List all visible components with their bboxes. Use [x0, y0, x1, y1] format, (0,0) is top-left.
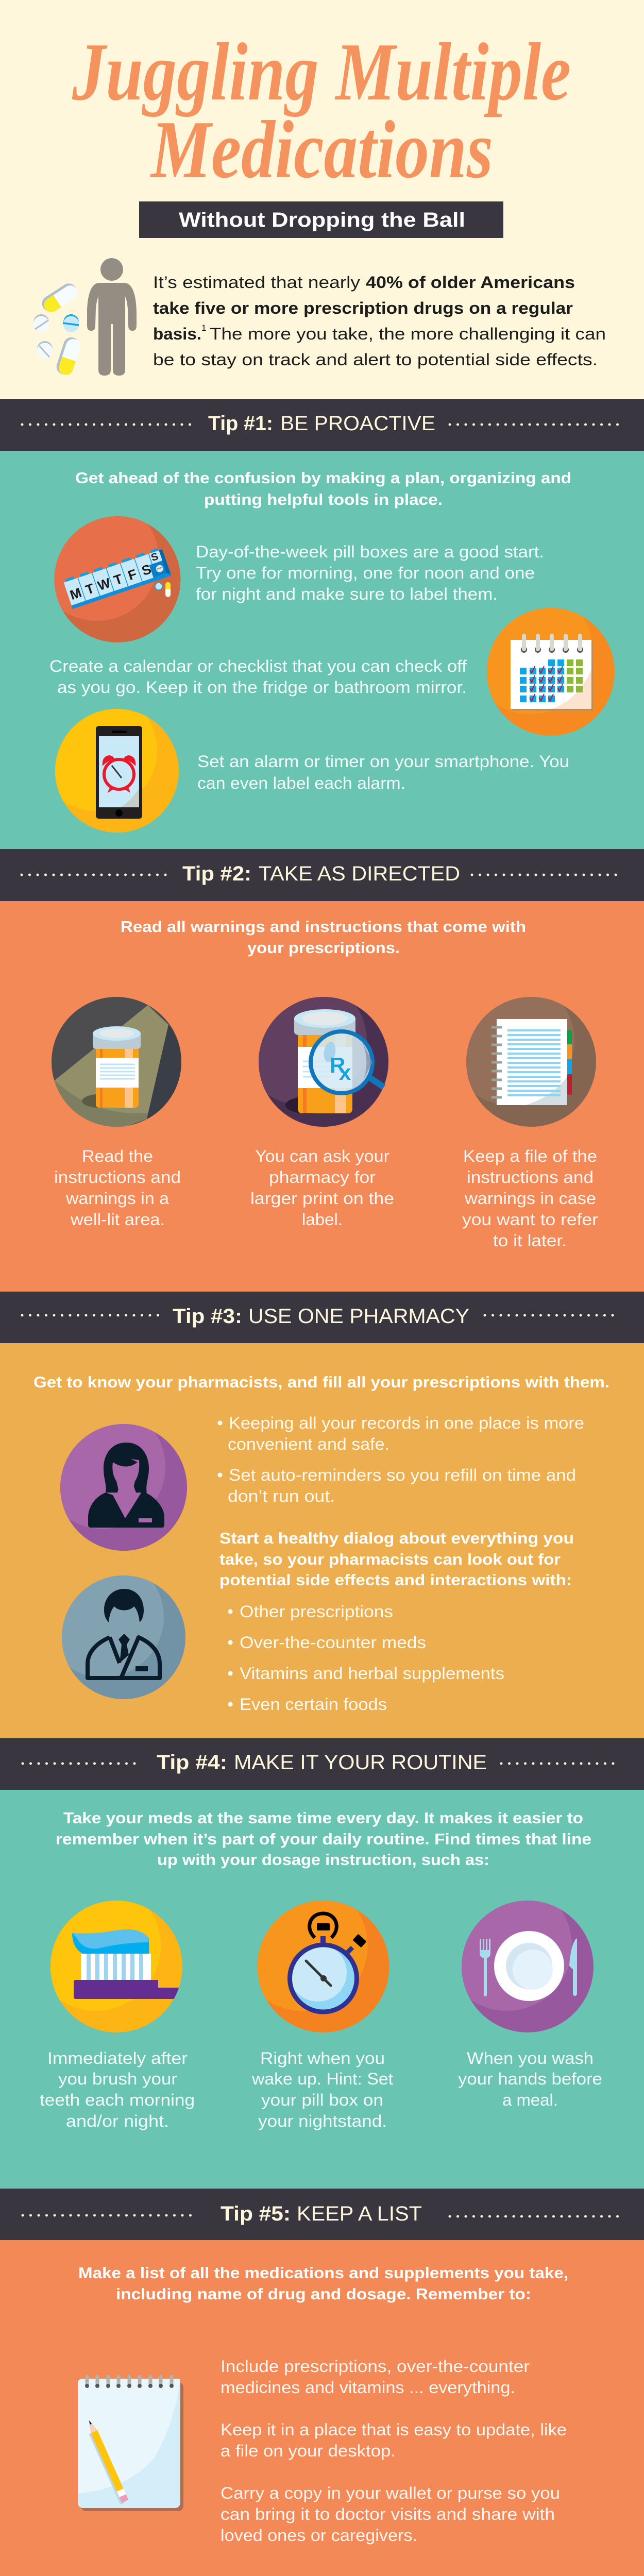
bulleted interactions list	[228, 1602, 504, 1714]
tip 4 intro: Take your meds at the same time every day. It makes it easier to	[63, 1809, 583, 1827]
tip 2 header: Tip #2:	[182, 862, 251, 885]
tip 1 intro: putting helpful tools in place.	[204, 490, 443, 509]
tip 3 intro: Get to know your pharmacists, and fill all your prescriptions with them.	[33, 1373, 609, 1391]
tip 5 intro	[78, 2264, 568, 2303]
column 3 text: Keep a file of the	[463, 1147, 597, 1165]
icon: notepad and pencil	[78, 2377, 183, 2511]
tip 2 intro: Read all warnings and instructions that come with	[121, 918, 526, 936]
list text: loved ones or caregivers.	[221, 2526, 417, 2545]
icon: plate and cutlery	[462, 1901, 594, 2032]
pill box text	[196, 543, 544, 603]
column 3 text: instructions and	[467, 1168, 594, 1187]
routine column 3 text: your hands before	[458, 2070, 602, 2088]
icon: pill box: S	[140, 561, 153, 579]
tip 3 header: Tip #3:	[173, 1305, 242, 1328]
routine column 2 text: your pill box on	[261, 2091, 383, 2109]
panel: tip 1 be proactive	[0, 451, 644, 849]
tip 5 header: Tip #5:	[221, 2202, 291, 2225]
bulleted records list: convenient and safe.	[228, 1435, 389, 1453]
icon: toothbrush	[50, 1901, 182, 2032]
alarm text	[197, 752, 569, 792]
column 3 text	[462, 1147, 598, 1250]
bulleted interactions list: Even certain foods	[240, 1695, 387, 1714]
tip 2 header	[0, 849, 644, 901]
pill box text: Day-of-the-week pill boxes are a good start.	[196, 543, 544, 561]
routine column 1 text: Immediately after	[47, 2049, 188, 2067]
tip 5 intro: including name of drug and dosage. Remember to:	[116, 2285, 531, 2303]
column 1 text	[54, 1147, 181, 1229]
tip 2 header: TAKE AS DIRECTED	[259, 862, 460, 885]
icon: male pharmacist	[62, 1575, 185, 1699]
healthy dialog text: potential side effects and interactions with:	[219, 1571, 572, 1589]
bulleted interactions list: Over-the-counter meds	[240, 1633, 426, 1652]
routine column 3 text: When you wash	[467, 2049, 594, 2067]
tip 1 intro: Get ahead of the confusion by making a plan, organizing and	[75, 469, 571, 487]
intro text: 1	[201, 323, 206, 333]
healthy dialog text: take, so your pharmacists can look out for	[219, 1550, 561, 1568]
column 3 text: warnings in case	[464, 1189, 596, 1208]
tip 5 header: KEEP A LIST	[297, 2202, 422, 2225]
icon: stopwatch	[258, 1901, 389, 2032]
icon: person with pills	[33, 258, 137, 377]
intro text: basis.	[153, 325, 201, 343]
list text: a file on your desktop.	[221, 2442, 396, 2460]
column 3 text: you want to refer	[462, 1210, 598, 1229]
alarm text: Set an alarm or timer on your smartphone. You	[197, 752, 569, 771]
intro text	[153, 273, 606, 369]
routine column 2 text: Right when you	[260, 2049, 385, 2067]
tip 4 intro: remember when it’s part of your daily routine. Find times that line	[56, 1830, 591, 1848]
bulleted interactions list: Other prescriptions	[240, 1602, 393, 1621]
column 3 text: to it later.	[493, 1231, 567, 1250]
bulleted records list: Set auto-reminders so you refill on time and	[229, 1466, 576, 1484]
intro text: 40% of older Americans	[366, 273, 575, 292]
icon: smartphone alarm	[55, 709, 179, 833]
calendar text: as you go. Keep it on the fridge or bathroom mirror.	[57, 678, 467, 697]
column 1 text: instructions and	[54, 1168, 181, 1187]
tip 3 header	[0, 1292, 644, 1343]
bulleted records list	[217, 1414, 584, 1505]
bulleted records list: don’t run out.	[228, 1487, 335, 1505]
icon: pill box	[55, 516, 180, 642]
routine column 3 text	[458, 2049, 602, 2109]
routine column 2 text: your nightstand.	[258, 2112, 387, 2130]
calendar text: Create a calendar or checklist that you can check off	[49, 657, 467, 675]
tip 5 intro: Make a list of all the medications and supplements you take,	[78, 2264, 568, 2282]
intro text: The more you take, the more challenging it can	[210, 325, 606, 343]
icon: pill box: M	[68, 585, 83, 603]
column 2 text: label.	[302, 1210, 343, 1229]
column 1 text: warnings in a	[65, 1189, 169, 1208]
icon: calendar checklist	[487, 608, 615, 736]
icon: pill box: T	[83, 580, 96, 598]
routine column 2 text	[251, 2049, 393, 2130]
list text: Keep it in a place that is easy to update, like	[221, 2420, 567, 2439]
tip 3 header: USE ONE PHARMACY	[248, 1305, 469, 1328]
column 2 text: You can ask your	[255, 1147, 389, 1165]
routine column 3 text: a meal.	[502, 2091, 558, 2109]
calendar text	[49, 657, 467, 697]
tip 4 intro	[56, 1809, 591, 1869]
tip 2 intro	[121, 918, 526, 957]
column 1 text: well-lit area.	[70, 1210, 165, 1229]
bulleted records list: Keeping all your records in one place is more	[229, 1414, 584, 1432]
icon: pill box: T	[112, 571, 125, 588]
pill box text: for night and make sure to label them.	[196, 585, 498, 603]
tip 5 header	[0, 2189, 644, 2240]
tip 1 header	[0, 399, 644, 451]
column 2 text: larger print on the	[250, 1189, 394, 1208]
panel: tip 4 make it your routine	[0, 1790, 644, 2189]
icon: bottle and magnifier: R	[330, 1053, 345, 1077]
subtitle banner	[139, 201, 503, 238]
pill box text: Try one for morning, one for noon and one	[196, 564, 535, 582]
routine column 2 text: wake up. Hint: Set	[251, 2070, 393, 2088]
icon: pill box: F	[126, 566, 139, 583]
icon: pill box: S	[149, 551, 160, 564]
column 2 text: pharmacy for	[269, 1168, 376, 1187]
alarm text: can even label each alarm.	[197, 774, 405, 792]
panel: tip 2 take as directed	[0, 901, 644, 1292]
tip 4 intro: up with your dosage instruction, such as:	[157, 1851, 489, 1869]
column 1 text: Read the	[82, 1147, 153, 1165]
tip 4 header: Tip #4:	[157, 1751, 227, 1774]
icon: notebook file	[466, 997, 596, 1127]
healthy dialog text: Start a healthy dialog about everything you	[219, 1529, 574, 1547]
icon: bottle in light	[52, 997, 181, 1127]
bulleted interactions list: Vitamins and herbal supplements	[240, 1664, 504, 1683]
column 2 text	[250, 1147, 394, 1229]
tip 1 header: Tip #1:	[208, 412, 273, 435]
list text: can bring it to doctor visits and share with	[221, 2505, 555, 2523]
tip 4 header: MAKE IT YOUR ROUTINE	[234, 1751, 487, 1774]
routine column 1 text: teeth each morning	[40, 2091, 195, 2109]
panel: tip 3 use one pharmacy	[0, 1343, 644, 1738]
icon: bottle and magnifier: x	[339, 1060, 351, 1084]
panel: tip 5 keep a list	[0, 2240, 644, 2576]
tip 1 intro	[75, 469, 571, 509]
intro text: be to stay on track and alert to potential side effects.	[153, 350, 598, 369]
routine column 1 text: and/or night.	[66, 2112, 169, 2130]
icon: female pharmacist	[60, 1424, 187, 1551]
title	[72, 26, 571, 195]
healthy dialog text	[219, 1529, 574, 1589]
intro text: It’s estimated that nearly	[153, 273, 360, 292]
intro text: take five or more prescription drugs on a regular	[153, 299, 573, 317]
icon: pill box: W	[95, 575, 113, 594]
list text: medicines and vitamins ... everything.	[221, 2378, 515, 2397]
routine column 1 text	[40, 2049, 195, 2130]
subtitle banner: Without Dropping the Ball	[179, 209, 465, 231]
tip 2 intro: your prescriptions.	[247, 939, 400, 957]
tip 1 header: BE PROACTIVE	[280, 412, 435, 435]
list text: Include prescriptions, over-the-counter	[221, 2357, 530, 2376]
list text: Carry a copy in your wallet or purse so you	[221, 2484, 560, 2502]
routine column 1 text: you brush your	[58, 2070, 177, 2088]
tip 4 header	[0, 1738, 644, 1790]
title: Medications	[150, 104, 493, 195]
icon: bottle and magnifier	[259, 997, 388, 1127]
list text	[221, 2357, 567, 2545]
